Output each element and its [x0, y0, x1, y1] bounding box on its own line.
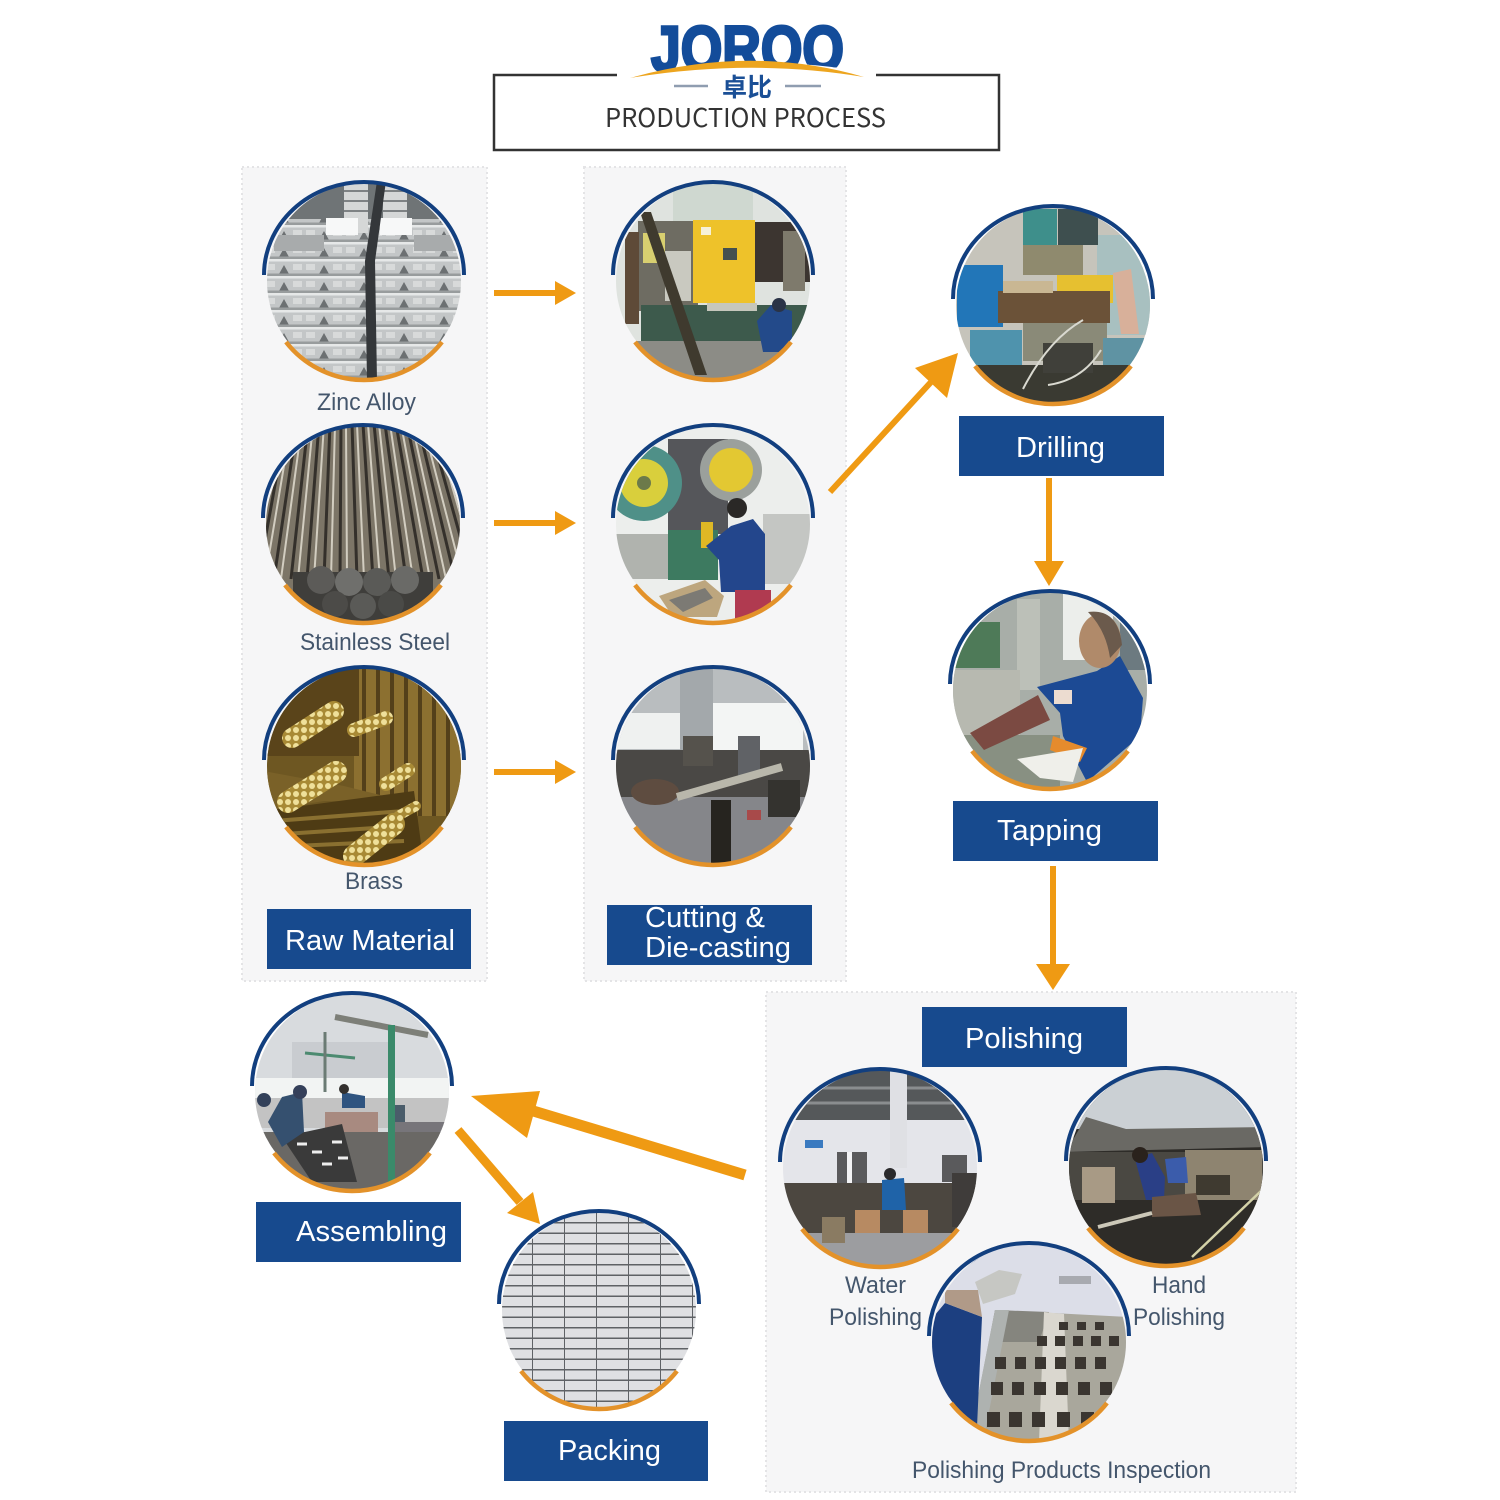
button: assembling	[256, 1202, 461, 1262]
photo: punch press	[606, 424, 813, 624]
label: hand polishing	[1133, 1272, 1225, 1331]
button: packing	[504, 1421, 708, 1481]
title box	[494, 75, 999, 150]
button: packing: Packing	[558, 1435, 661, 1467]
photo: brass	[264, 666, 464, 866]
arrow: polishing to assembling	[471, 1091, 745, 1175]
arrow: cutting to drilling	[830, 353, 958, 492]
label: brass: Brass	[345, 868, 403, 895]
button: cutting and die-casting: Cutting &	[645, 902, 765, 934]
arrow: assembling to packing	[458, 1130, 540, 1224]
photo: stainless steel	[261, 423, 465, 626]
title: PRODUCTION PROCESS	[605, 98, 886, 135]
logo swoosh	[630, 61, 864, 78]
logo chinese name: 卓比	[722, 74, 772, 102]
photo: drilling	[953, 205, 1153, 405]
button: tapping: Tapping	[997, 815, 1102, 847]
panel: raw material background	[242, 167, 487, 981]
arrow: stainless steel to cutting	[494, 511, 576, 535]
button: raw material	[267, 909, 471, 969]
label: zinc alloy: Zinc Alloy	[317, 389, 416, 416]
button: assembling: Assembling	[296, 1216, 447, 1248]
label: polishing products inspection: Polishing Products Inspection	[912, 1457, 1211, 1484]
panel: cutting and die-casting background	[584, 167, 846, 981]
button: cutting and die-casting: Die-casting	[645, 932, 791, 964]
photo: die-casting machine	[613, 181, 813, 381]
label: hand polishing: Polishing	[1133, 1304, 1225, 1331]
photo: water polishing	[780, 1068, 980, 1268]
photo: cutting workshop	[613, 666, 813, 866]
logo	[630, 24, 864, 98]
label: water polishing	[829, 1272, 922, 1331]
photo: assembling	[252, 992, 452, 1192]
photo: tapping	[950, 590, 1150, 790]
arrow: drilling to tapping	[1034, 478, 1064, 586]
label: water polishing: Water	[845, 1272, 906, 1299]
photo: hand polishing	[1066, 1067, 1266, 1267]
photo: zinc alloy	[264, 181, 464, 381]
photo: polishing products inspection	[929, 1242, 1129, 1442]
button: drilling: Drilling	[1016, 432, 1105, 464]
arrow: zinc alloy to die-casting	[494, 281, 576, 305]
arrow: tapping to polishing	[1036, 866, 1070, 990]
arrow: brass to cutting	[494, 760, 576, 784]
button: polishing	[922, 1007, 1127, 1067]
button: drilling	[959, 416, 1164, 476]
button: tapping	[953, 801, 1158, 861]
label: hand polishing: Hand	[1152, 1272, 1206, 1299]
logo side rules	[674, 85, 821, 87]
photo: packing	[499, 1210, 699, 1410]
button: raw material: Raw Material	[285, 925, 455, 957]
button: polishing: Polishing	[965, 1023, 1083, 1055]
panel: polishing background	[766, 992, 1296, 1492]
label: water polishing: Polishing	[829, 1304, 922, 1331]
label: stainless steel: Stainless Steel	[300, 629, 450, 656]
logo wordmark: JOROO	[651, 13, 844, 85]
button: cutting and die-casting	[607, 902, 812, 965]
